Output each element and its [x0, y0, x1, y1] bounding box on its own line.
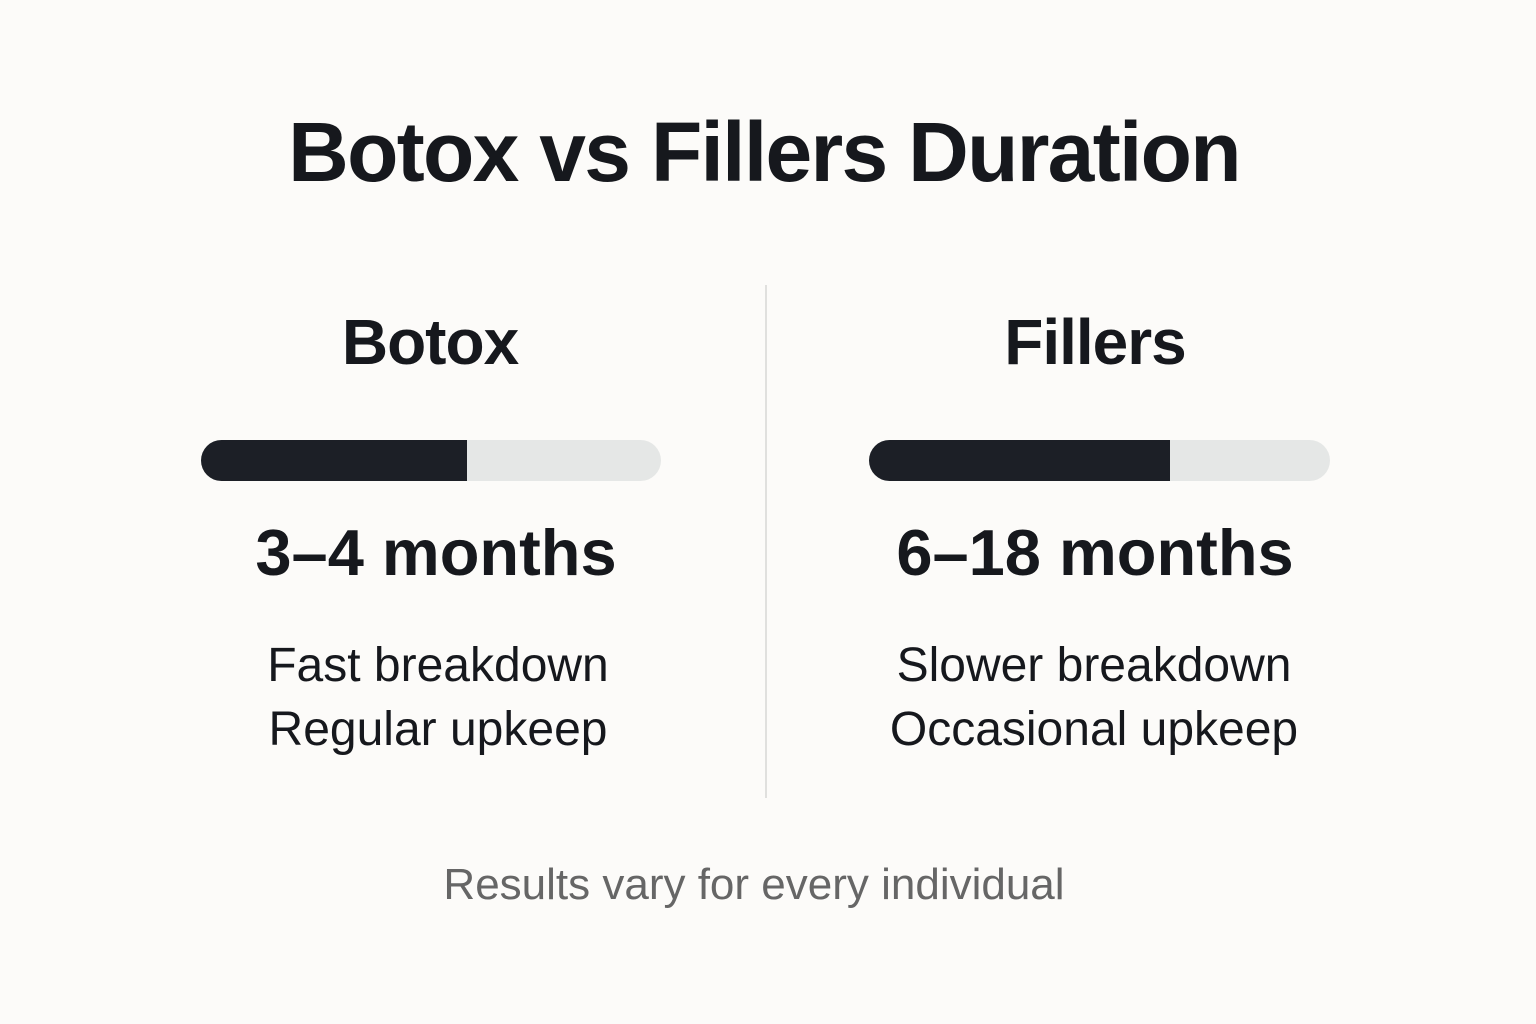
panel: botox — [201, 306, 661, 756]
value: 3–4 months: 3–4 months — [255, 516, 617, 589]
description — [267, 639, 609, 756]
bar: botox duration — [201, 440, 661, 481]
panel: fillers — [869, 306, 1330, 756]
footer note: Results vary for every individual — [443, 860, 1065, 909]
description: Fast breakdown — [267, 639, 609, 692]
heading: Fillers: Fillers — [1004, 306, 1186, 378]
heading: Botox: Botox — [342, 306, 518, 378]
bar: fillers duration — [869, 440, 1330, 481]
description: Regular upkeep — [269, 703, 607, 756]
divider — [765, 285, 767, 798]
description — [890, 639, 1298, 756]
title: Botox vs Fillers Duration — [288, 105, 1240, 199]
description: Slower breakdown — [897, 639, 1291, 692]
description: Occasional upkeep — [890, 703, 1298, 756]
value: 6–18 months: 6–18 months — [896, 516, 1294, 589]
